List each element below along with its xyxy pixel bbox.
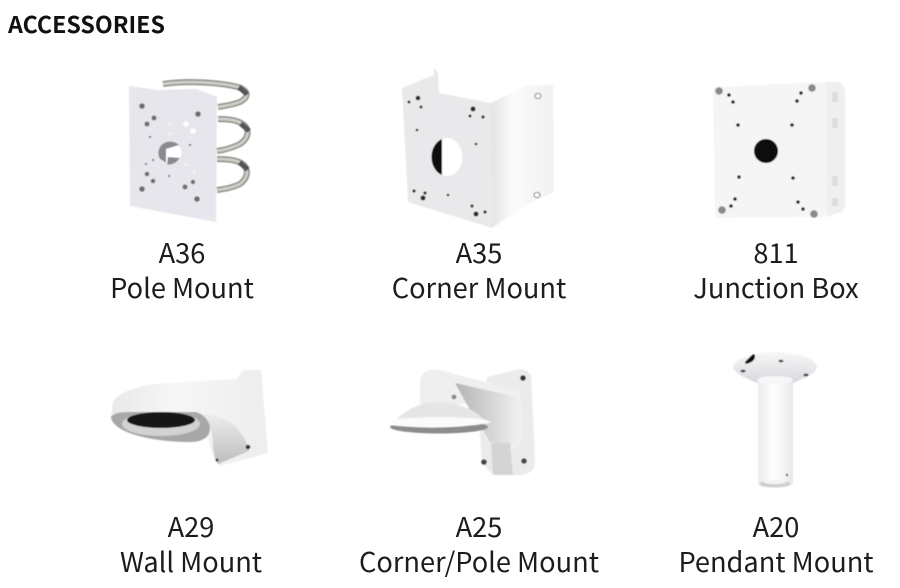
caption: A36 Pole Mount: A36 (159, 231, 205, 271)
caption: A25 Corner/Pole Mount (359, 505, 599, 580)
caption: A36 Pole Mount (110, 231, 254, 306)
icon: 811 junction box (713, 82, 845, 218)
caption: 811 Junction Box: 811 (753, 231, 799, 271)
icon: A36 pole mount (129, 82, 251, 222)
caption: A35 Corner Mount (392, 231, 566, 306)
title: ACCESSORIES (8, 6, 165, 40)
caption: A35 Corner Mount: A35 (456, 231, 502, 271)
icon: A20 pendant mount (733, 352, 817, 488)
caption: 811 Junction Box (693, 231, 859, 306)
caption: A36 Pole Mount: Pole Mount (110, 266, 254, 306)
icon: A25 corner/pole mount (389, 369, 535, 475)
caption: A29 Wall Mount (120, 505, 262, 580)
caption: A20 Pendant Mount: Pendant Mount (678, 540, 874, 580)
caption: A25 Corner/Pole Mount: Corner/Pole Mount (359, 540, 599, 580)
caption: A29 Wall Mount: A29 (168, 505, 214, 545)
icon: A29 wall mount (111, 370, 268, 466)
caption: A25 Corner/Pole Mount: A25 (456, 505, 502, 545)
caption: A20 Pendant Mount: A20 (753, 505, 799, 545)
caption: A20 Pendant Mount (678, 505, 874, 580)
caption: 811 Junction Box: Junction Box (693, 266, 859, 306)
caption: A35 Corner Mount: Corner Mount (392, 266, 566, 306)
caption: A29 Wall Mount: Wall Mount (120, 540, 262, 580)
icon: A35 corner mount (402, 67, 554, 228)
